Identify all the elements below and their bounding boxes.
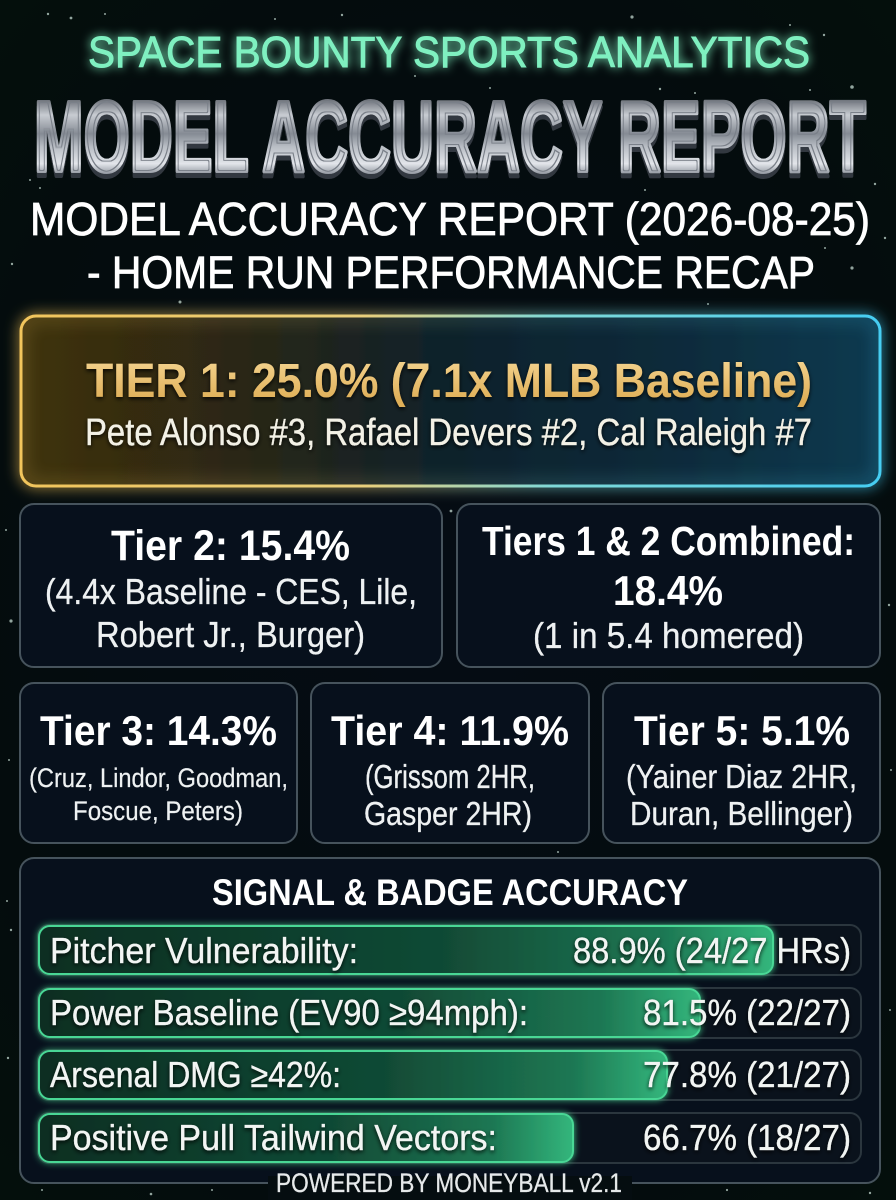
report subtitle: [30, 193, 870, 298]
tier 4 players: (Grissom 2HR,: [365, 758, 535, 795]
tier 2 details: (4.4x Baseline - CES, Lile,: [45, 571, 417, 612]
tier 5 players: [626, 758, 857, 832]
report subtitle: - HOME RUN PERFORMANCE RECAP: [87, 247, 815, 298]
bar: pitcher vulnerability: 88.9% (24/27 HRs): [573, 930, 851, 971]
panel: tier 2: [20, 504, 442, 667]
panel: tier 5: [603, 683, 880, 843]
tier 3 headline: Tier 3: 14.3%: [40, 707, 277, 754]
tier 5 headline: Tier 5: 5.1%: [634, 707, 850, 754]
footer credit: POWERED BY MONEYBALL v2.1: [276, 1168, 622, 1198]
tier 5 players: (Yainer Diaz 2HR,: [626, 758, 857, 795]
tier 3 players: (Cruz, Lindor, Goodman,: [29, 763, 288, 793]
panel: signal and badge accuracy: [20, 858, 880, 1183]
bar: power baseline: 81.5% (22/27): [643, 992, 851, 1033]
tier 2 headline: Tier 2: 15.4%: [111, 522, 350, 570]
panel: tier 4: [311, 683, 589, 843]
tier 5 players: Duran, Bellinger): [630, 795, 853, 832]
bar: arsenal dmg: [38, 1050, 861, 1100]
combined value: 18.4%: [613, 567, 723, 614]
bar: arsenal dmg: 77.8% (21/27): [643, 1054, 851, 1095]
tier 2 details: Robert Jr., Burger): [96, 614, 365, 655]
tier 4 players: [364, 758, 535, 832]
panel: tier 1: [21, 316, 880, 486]
combined note: (1 in 5.4 homered): [533, 615, 804, 656]
bar: power baseline: Power Baseline (EV90 ≥94mph):: [50, 992, 528, 1033]
bar: positive pull tailwind vectors: [38, 1113, 861, 1163]
brand heading: SPACE BOUNTY SPORTS ANALYTICS: [88, 28, 810, 77]
tier 3 players: [29, 763, 288, 826]
tier 1 headline: TIER 1: 25.0% (7.1x MLB Baseline): [86, 355, 812, 408]
bar: positive pull tailwind vectors: Positive Pull Tailwind Vectors:: [50, 1117, 497, 1158]
bar: arsenal dmg: Arsenal DMG ≥42%:: [50, 1054, 341, 1095]
bar: power baseline: [38, 988, 861, 1038]
panel: tiers 1 and 2 combined: [457, 504, 880, 667]
panel: tier 3: [20, 683, 297, 843]
tier 4 headline: Tier 4: 11.9%: [331, 707, 569, 754]
bar: positive pull tailwind vectors: 66.7% (18/27): [643, 1117, 851, 1158]
bar: pitcher vulnerability: [38, 925, 861, 975]
tier 3 players: Foscue, Peters): [73, 796, 243, 826]
bar: pitcher vulnerability: Pitcher Vulnerability:: [50, 930, 358, 971]
tier 4 players: Gasper 2HR): [364, 795, 532, 832]
signal heading: SIGNAL & BADGE ACCURACY: [212, 872, 688, 913]
tier 2 details: [45, 571, 417, 655]
